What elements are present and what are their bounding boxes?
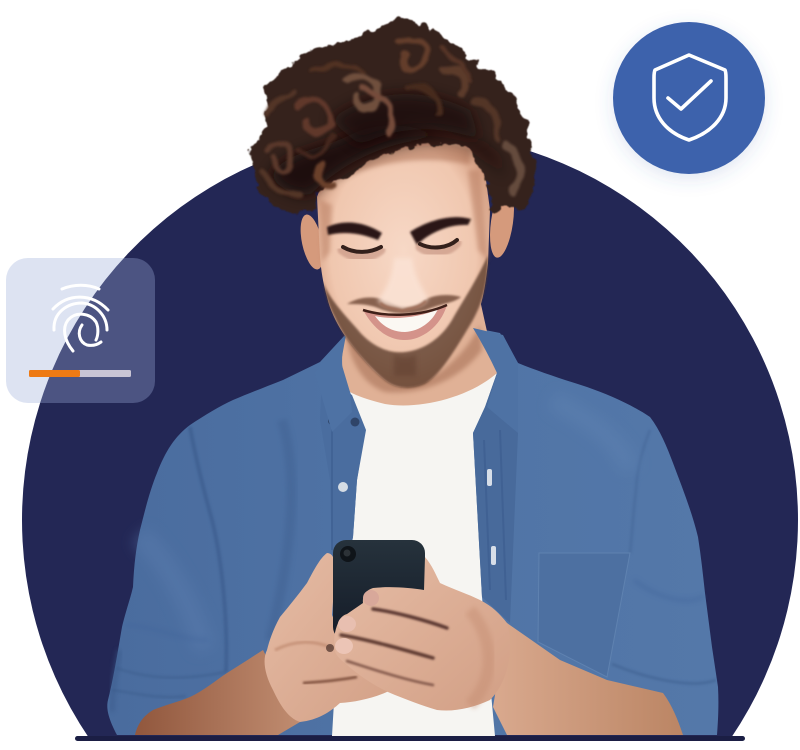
icon: fingerprint (53, 285, 108, 351)
background circle (22, 132, 798, 738)
shield badge (613, 22, 765, 174)
left hand (265, 553, 400, 722)
progress bar (29, 370, 131, 377)
person (107, 17, 718, 736)
neck (341, 300, 497, 405)
chest pocket (538, 553, 630, 677)
icon: shield with check (654, 55, 726, 140)
shirt (107, 328, 718, 735)
right forearm (493, 623, 683, 735)
mouth (363, 305, 447, 340)
hair (253, 17, 533, 214)
phone (333, 540, 425, 640)
ground line (75, 736, 745, 741)
face (317, 134, 490, 387)
card background (6, 258, 155, 403)
shirt plackets (320, 373, 518, 623)
nose (378, 258, 428, 311)
white t-shirt (332, 373, 497, 736)
eyebrows (327, 217, 471, 245)
eyes (342, 240, 457, 257)
left forearm (135, 650, 300, 735)
right hand (334, 557, 510, 711)
face shading (320, 141, 488, 262)
badge circle (613, 22, 765, 174)
ears (296, 185, 518, 271)
fingerprint card (6, 258, 155, 403)
beard (323, 255, 488, 388)
collar (315, 328, 518, 433)
shirt buttons (328, 417, 496, 565)
